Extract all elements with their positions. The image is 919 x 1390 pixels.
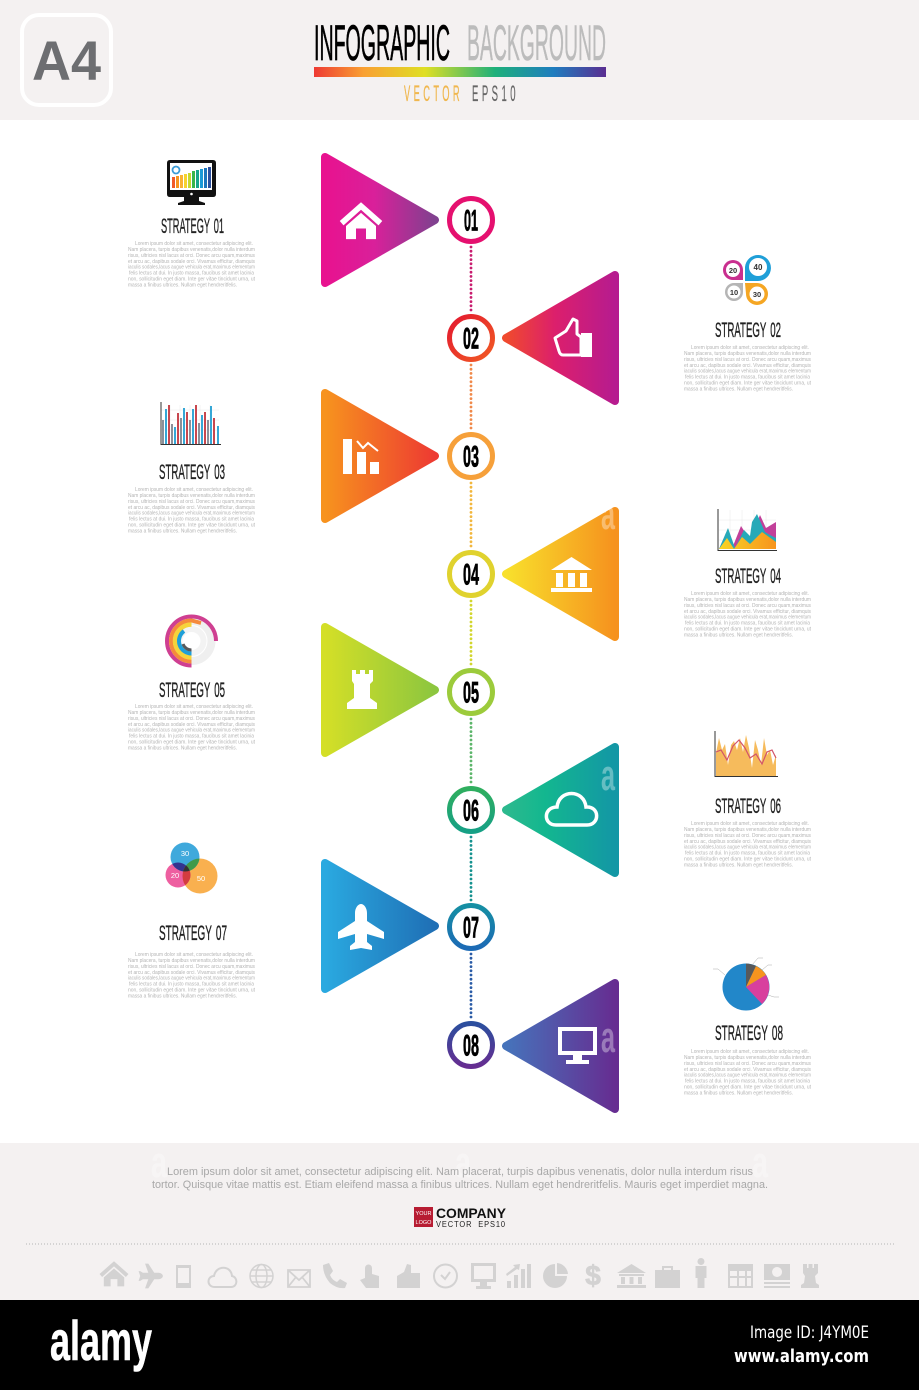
number badge 04: 04 [463,558,479,592]
text block: strategy 01: Lorem ipsum dolor sit amet, consectetur adipiscing elit. [135,241,253,247]
text: STRATEGY 05 [159,679,225,702]
icon: pie [543,1263,568,1288]
text block: strategy 04: risus, ultricies nisl lacus at orci. Donec arcu quam,maximus [684,603,811,609]
text block: strategy 06: massa a finibus ultrices. Nullam eget hendreritfelis. [684,862,793,868]
text block: strategy 08: felis lectus at dui. In justo massa, faucibus sit amet lacinia [685,1078,810,1084]
text block: strategy 01: non, sollicitudin eget diam. Inte ger vitae tincidunt urna, ut [128,276,256,282]
icon: thumb [397,1264,420,1288]
watermark marks [151,490,768,1187]
company logo: LOGO [416,1220,432,1226]
text block: strategy 07: risus, ultricies nisl lacus at orci. Donec arcu quam,maximus [128,964,255,970]
image id: Image ID: J4YM0E [750,1323,869,1343]
icon: numbered bubbles: 20 [729,266,737,275]
text block: strategy 02: massa a finibus ultrices. Nullam eget hendreritfelis. [684,386,793,392]
step 04: triangle with bank [506,511,615,637]
text block: strategy 06 [684,821,812,868]
text block: strategy 06: risus, ultricies nisl lacus at orci. Donec arcu quam,maximus [684,833,811,839]
text block: strategy 02: felis lectus at dui. In justo massa, faucibus sit amet lacinia [685,374,810,380]
badge: A4 [22,15,111,105]
text block: strategy 03: et arcu ac, dapibus sodale orci. Vivamus efficitur, diamquis [128,505,255,511]
text block: strategy 01: et arcu ac, dapibus sodale orci. Vivamus efficitur, diamquis [128,259,255,265]
footer text [152,1166,768,1191]
step 03: triangle with chart [325,393,435,519]
watermark marks: a [601,1013,615,1062]
icon: numbered bubbles [723,255,771,305]
icon: bar and line chart [715,731,778,776]
footer text: tortor. Quisque vitae mattis est. Etiam eleifend massa a finibus ultrices. Nullam eget hendreritfelis. Mauris eget imperdiet magna. [152,1179,768,1191]
icon: cloud [208,1268,236,1287]
icon: bar growth [506,1264,531,1288]
text block: strategy 04: non, sollicitudin eget diam. Inte ger vitae tincidunt urna, ut [684,626,812,632]
footer text: Lorem ipsum dolor sit amet, consectetur adipiscing elit. Nam placerat, turpis dapibus venenatis, dolor nulla interdum risus [167,1166,753,1178]
text block: strategy 04: felis lectus at dui. In justo massa, faucibus sit amet lacinia [685,620,810,626]
icon: numbered bubbles: 40 [754,263,763,272]
text block: strategy 03: massa a finibus ultrices. Nullam eget hendreritfelis. [128,528,237,534]
icon: venn diagram [166,842,218,894]
text block: strategy 07: Lorem ipsum dolor sit amet, consectetur adipiscing elit. [135,952,253,958]
icon: banknote [764,1264,790,1288]
text block: strategy 06: Lorem ipsum dolor sit amet, consectetur adipiscing elit. [691,821,809,827]
text block: strategy 08: Lorem ipsum dolor sit amet, consectetur adipiscing elit. [691,1049,809,1055]
number badge 05 [450,670,492,714]
icon: globe [250,1264,273,1288]
text: STRATEGY 02 [715,319,781,342]
text block: strategy 08: massa a finibus ultrices. Nullam eget hendreritfelis. [684,1090,793,1096]
text block: strategy 08: risus, ultricies nisl lacus at orci. Donec arcu quam,maximus [684,1061,811,1067]
text block: strategy 03 [128,487,256,534]
icon: area chart [718,509,777,550]
text block: strategy 05: Lorem ipsum dolor sit amet, consectetur adipiscing elit. [135,704,253,710]
text block: strategy 03: felis lectus at dui. In justo massa, faucibus sit amet lacinia [129,516,254,522]
text block: strategy 07: et arcu ac, dapibus sodale orci. Vivamus efficitur, diamquis [128,970,255,976]
step 07: triangle with plane [325,863,435,989]
icon: bank [617,1264,646,1288]
number badge 06: 06 [463,794,479,828]
watermark marks: a [601,751,615,800]
icon: clock [434,1264,457,1288]
title: INFOGRAPHIC [314,15,450,71]
text: STRATEGY 03 [159,461,225,484]
text block: strategy 06: et arcu ac, dapibus sodale orci. Vivamus efficitur, diamquis [684,839,811,845]
icon: touch hand [360,1265,379,1288]
text: EPS10 [472,81,519,106]
step 06: triangle with cloud [506,747,615,873]
company logo: COMPANY [436,1205,507,1221]
number badge 06 [450,788,492,832]
text: STRATEGY 07 [159,922,227,945]
text block: strategy 06: felis lectus at dui. In justo massa, faucibus sit amet lacinia [685,850,810,856]
step 01: triangle with house [325,157,435,283]
text block: strategy 03: Lorem ipsum dolor sit amet, consectetur adipiscing elit. [135,487,253,493]
icon: briefcase [655,1266,680,1288]
icon: pie chart [713,958,779,1010]
icon: numbered bubbles: 30 [753,290,761,299]
text: STRATEGY 01 [161,215,224,238]
icon: person [696,1258,706,1288]
step 02: triangle with thumb [506,275,615,401]
text block: strategy 01: massa a finibus ultrices. Nullam eget hendreritfelis. [128,282,237,288]
number badge 07: 07 [463,912,479,944]
text block: strategy 02: risus, ultricies nisl lacus at orci. Donec arcu quam,maximus [684,357,811,363]
text block: strategy 05: massa a finibus ultrices. Nullam eget hendreritfelis. [128,746,237,752]
text block: strategy 02: iaculis sodales,lacus augue vehicula erat,maximus elementum [684,368,811,374]
number badge 08 [450,1024,492,1066]
icon: rook [801,1264,819,1288]
text block: strategy 04 [684,591,812,638]
company logo [414,1205,507,1229]
alamy wordmark: alamy [50,1309,152,1372]
number badge 02: 02 [463,322,479,356]
text block: strategy 05: iaculis sodales,lacus augue vehicula erat,maximus elementum [128,728,255,734]
text block: strategy 08: Nam placera, turpis dapibus venenatis,dolor nulla interdum [684,1055,811,1061]
text block: strategy 05: non, sollicitudin eget diam. Inte ger vitae tincidunt urna, ut [128,740,256,746]
bottom black band [0,1300,919,1390]
text block: strategy 01 [128,241,256,288]
icon: bar chart [161,402,221,445]
footer icon row [100,1258,819,1291]
text block: strategy 05: risus, ultricies nisl lacus at orci. Donec arcu quam,maximus [128,716,255,722]
text block: strategy 02: Nam placera, turpis dapibus venenatis,dolor nulla interdum [684,351,811,357]
text: STRATEGY 08 [715,1022,783,1045]
text block: strategy 04: massa a finibus ultrices. Nullam eget hendreritfelis. [684,632,793,638]
text block: strategy 03: Nam placera, turpis dapibus venenatis,dolor nulla interdum [128,493,255,499]
icon: monitor with bar chart [167,160,216,205]
icon: envelope [288,1270,310,1287]
number badge 07 [450,906,492,948]
text block: strategy 04: Lorem ipsum dolor sit amet, consectetur adipiscing elit. [691,591,809,597]
text: BACKGROUND [467,15,606,71]
text block: strategy 08: non, sollicitudin eget diam. Inte ger vitae tincidunt urna, ut [684,1084,812,1090]
number badge 03: 03 [463,440,479,474]
text block: strategy 05: felis lectus at dui. In justo massa, faucibus sit amet lacinia [129,734,254,740]
text block: strategy 07: iaculis sodales,lacus augue vehicula erat,maximus elementum [128,976,255,982]
text block: strategy 03: risus, ultricies nisl lacus at orci. Donec arcu quam,maximus [128,499,255,505]
icon: dollar: $ [585,1260,601,1291]
text block: strategy 05: et arcu ac, dapibus sodale orci. Vivamus efficitur, diamquis [128,722,255,728]
text block: strategy 07: massa a finibus ultrices. Nullam eget hendreritfelis. [128,994,237,1000]
icon: venn diagram: 50 [197,874,205,883]
text block: strategy 06: non, sollicitudin eget diam. Inte ger vitae tincidunt urna, ut [684,856,812,862]
text block: strategy 01: Nam placera, turpis dapibus venenatis,dolor nulla interdum [128,247,255,253]
icon: home [100,1261,128,1286]
step 08: triangle with monitor [506,983,615,1109]
icon: phone [176,1265,191,1288]
text block: strategy 07: non, sollicitudin eget diam. Inte ger vitae tincidunt urna, ut [128,988,256,994]
subtitle: VECTOR [404,81,463,106]
timeline connector [470,247,472,1021]
icon: plane [139,1264,163,1288]
text block: strategy 01: felis lectus at dui. In justo massa, faucibus sit amet lacinia [129,270,254,276]
rainbow bar [314,67,606,77]
text block: strategy 02: non, sollicitudin eget diam. Inte ger vitae tincidunt urna, ut [684,380,812,386]
header band [0,0,919,120]
text block: strategy 08: iaculis sodales,lacus augue vehicula erat,maximus elementum [684,1072,811,1078]
text block: strategy 04: iaculis sodales,lacus augue vehicula erat,maximus elementum [684,614,811,620]
text block: strategy 08 [684,1049,812,1096]
text block: strategy 06: Nam placera, turpis dapibus venenatis,dolor nulla interdum [684,827,811,833]
number badge 02 [450,316,492,360]
watermark marks: a [151,1138,167,1187]
icon: radial rainbow chart [167,616,216,666]
number badge 01: 01 [464,204,478,238]
text block: strategy 03: iaculis sodales,lacus augue vehicula erat,maximus elementum [128,510,255,516]
text block: strategy 04: Nam placera, turpis dapibus venenatis,dolor nulla interdum [684,597,811,603]
text block: strategy 07 [128,952,256,1000]
number badge 08: 08 [463,1030,479,1062]
text block: strategy 02 [684,345,812,392]
text block: strategy 02: et arcu ac, dapibus sodale orci. Vivamus efficitur, diamquis [684,363,811,369]
number badge 05: 05 [463,676,479,710]
text: STRATEGY 06 [715,795,781,818]
text block: strategy 06: iaculis sodales,lacus augue vehicula erat,maximus elementum [684,844,811,850]
icon: calculator [728,1264,753,1288]
text block: strategy 08: et arcu ac, dapibus sodale orci. Vivamus efficitur, diamquis [684,1067,811,1073]
text block: strategy 03: non, sollicitudin eget diam. Inte ger vitae tincidunt urna, ut [128,522,256,528]
icon: venn diagram: 30 [181,849,189,858]
icon: numbered bubbles: 10 [730,288,738,297]
text block: strategy 05: Nam placera, turpis dapibus venenatis,dolor nulla interdum [128,710,255,716]
text block: strategy 01: risus, ultricies nisl lacus at orci. Donec arcu quam,maximus [128,253,255,259]
footer band [0,1143,919,1300]
icon: desktop [471,1263,496,1289]
text block: strategy 05 [128,704,256,752]
text: STRATEGY 04 [715,565,781,588]
icon: venn diagram: 20 [171,871,179,880]
text block: strategy 01: iaculis sodales,lacus augue vehicula erat,maximus elementum [128,264,255,270]
step 05: triangle with rook [325,627,435,753]
text block: strategy 04: et arcu ac, dapibus sodale orci. Vivamus efficitur, diamquis [684,609,811,615]
website: www.alamy.com [734,1346,869,1367]
icon: telephone handset [323,1263,347,1288]
watermark marks: a [752,1138,768,1187]
badge: A4: A4 [32,29,101,92]
number badge 03 [450,434,492,478]
company logo: YOUR [416,1211,431,1217]
number badge 01 [450,198,492,242]
text block: strategy 02: Lorem ipsum dolor sit amet, consectetur adipiscing elit. [691,345,809,351]
number badge 04 [450,552,492,596]
company logo: VECTOR EPS10 [436,1220,506,1229]
text block: strategy 07: Nam placera, turpis dapibus venenatis,dolor nulla interdum [128,958,255,964]
watermark marks: a [455,1138,471,1187]
watermark marks: a [601,490,615,539]
text block: strategy 07: felis lectus at dui. In justo massa, faucibus sit amet lacinia [129,982,254,988]
